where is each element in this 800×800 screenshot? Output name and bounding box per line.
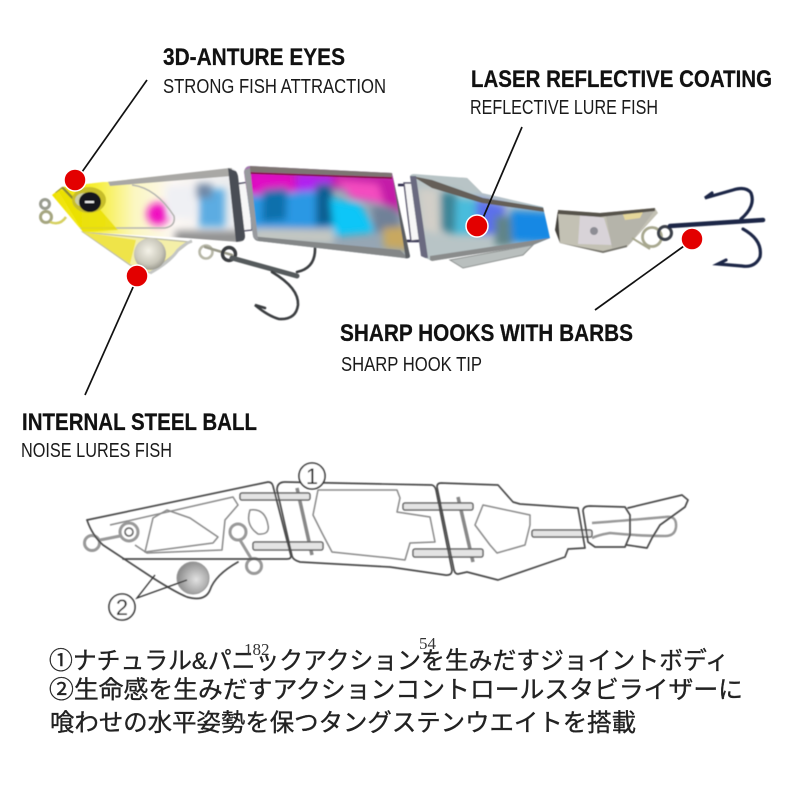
outlines (87, 482, 291, 559)
Japanese description: ②生命感を生みだすアクションコントロールスタビライザーに (49, 676, 743, 704)
marker 1: 1 (306, 464, 318, 489)
callout: laser coating: REFLECTIVE LURE FISH (470, 97, 658, 119)
callout: laser coating (466, 66, 772, 237)
body segment (243, 165, 411, 260)
internal ball (177, 562, 209, 594)
split rings (632, 226, 672, 249)
marker 1 (299, 463, 325, 489)
callout: 3D eyes: 3D-ANTURE EYES (163, 44, 345, 71)
nose eyelets (40, 200, 66, 223)
lower lip (83, 232, 190, 273)
Japanese description (49, 647, 743, 737)
joint pins (236, 182, 420, 241)
treble hook (670, 189, 763, 266)
cavities (110, 497, 238, 553)
callout: sharp hooks: SHARP HOOK TIP (341, 354, 482, 376)
callout: steel ball: INTERNAL STEEL BALL (22, 409, 257, 436)
marker 2 (109, 594, 135, 620)
front rear hook (200, 246, 315, 319)
callout: sharp hooks: SHARP HOOKS WITH BARBS (340, 320, 633, 347)
callout: 3D eyes (64, 44, 386, 191)
line diagram of lure (84, 463, 688, 620)
lure eye (72, 187, 106, 213)
stray number 54: 54 (419, 634, 436, 653)
tail connector (554, 207, 658, 254)
leader lines (137, 575, 187, 598)
steel ball (134, 238, 166, 270)
head segment (50, 165, 250, 245)
tail segment (409, 174, 551, 262)
tail segment fin (450, 245, 533, 268)
callout: 3D eyes: STRONG FISH ATTRACTION (163, 76, 386, 98)
marker 2: 2 (116, 595, 128, 620)
Japanese description: ①ナチュラル&パニックアクションを生みだすジョイントボディ (49, 647, 729, 675)
internal wires (240, 488, 676, 562)
callout: steel ball (21, 265, 257, 462)
lure photo (40, 160, 763, 319)
callout: sharp hooks (340, 228, 703, 376)
callout: steel ball: NOISE LURES FISH (21, 440, 172, 462)
stray number 182: 182 (244, 640, 270, 659)
eyelets (84, 523, 262, 574)
Japanese description: 喰わせの水平姿勢を保つタングステンウエイトを搭載 (50, 709, 636, 737)
